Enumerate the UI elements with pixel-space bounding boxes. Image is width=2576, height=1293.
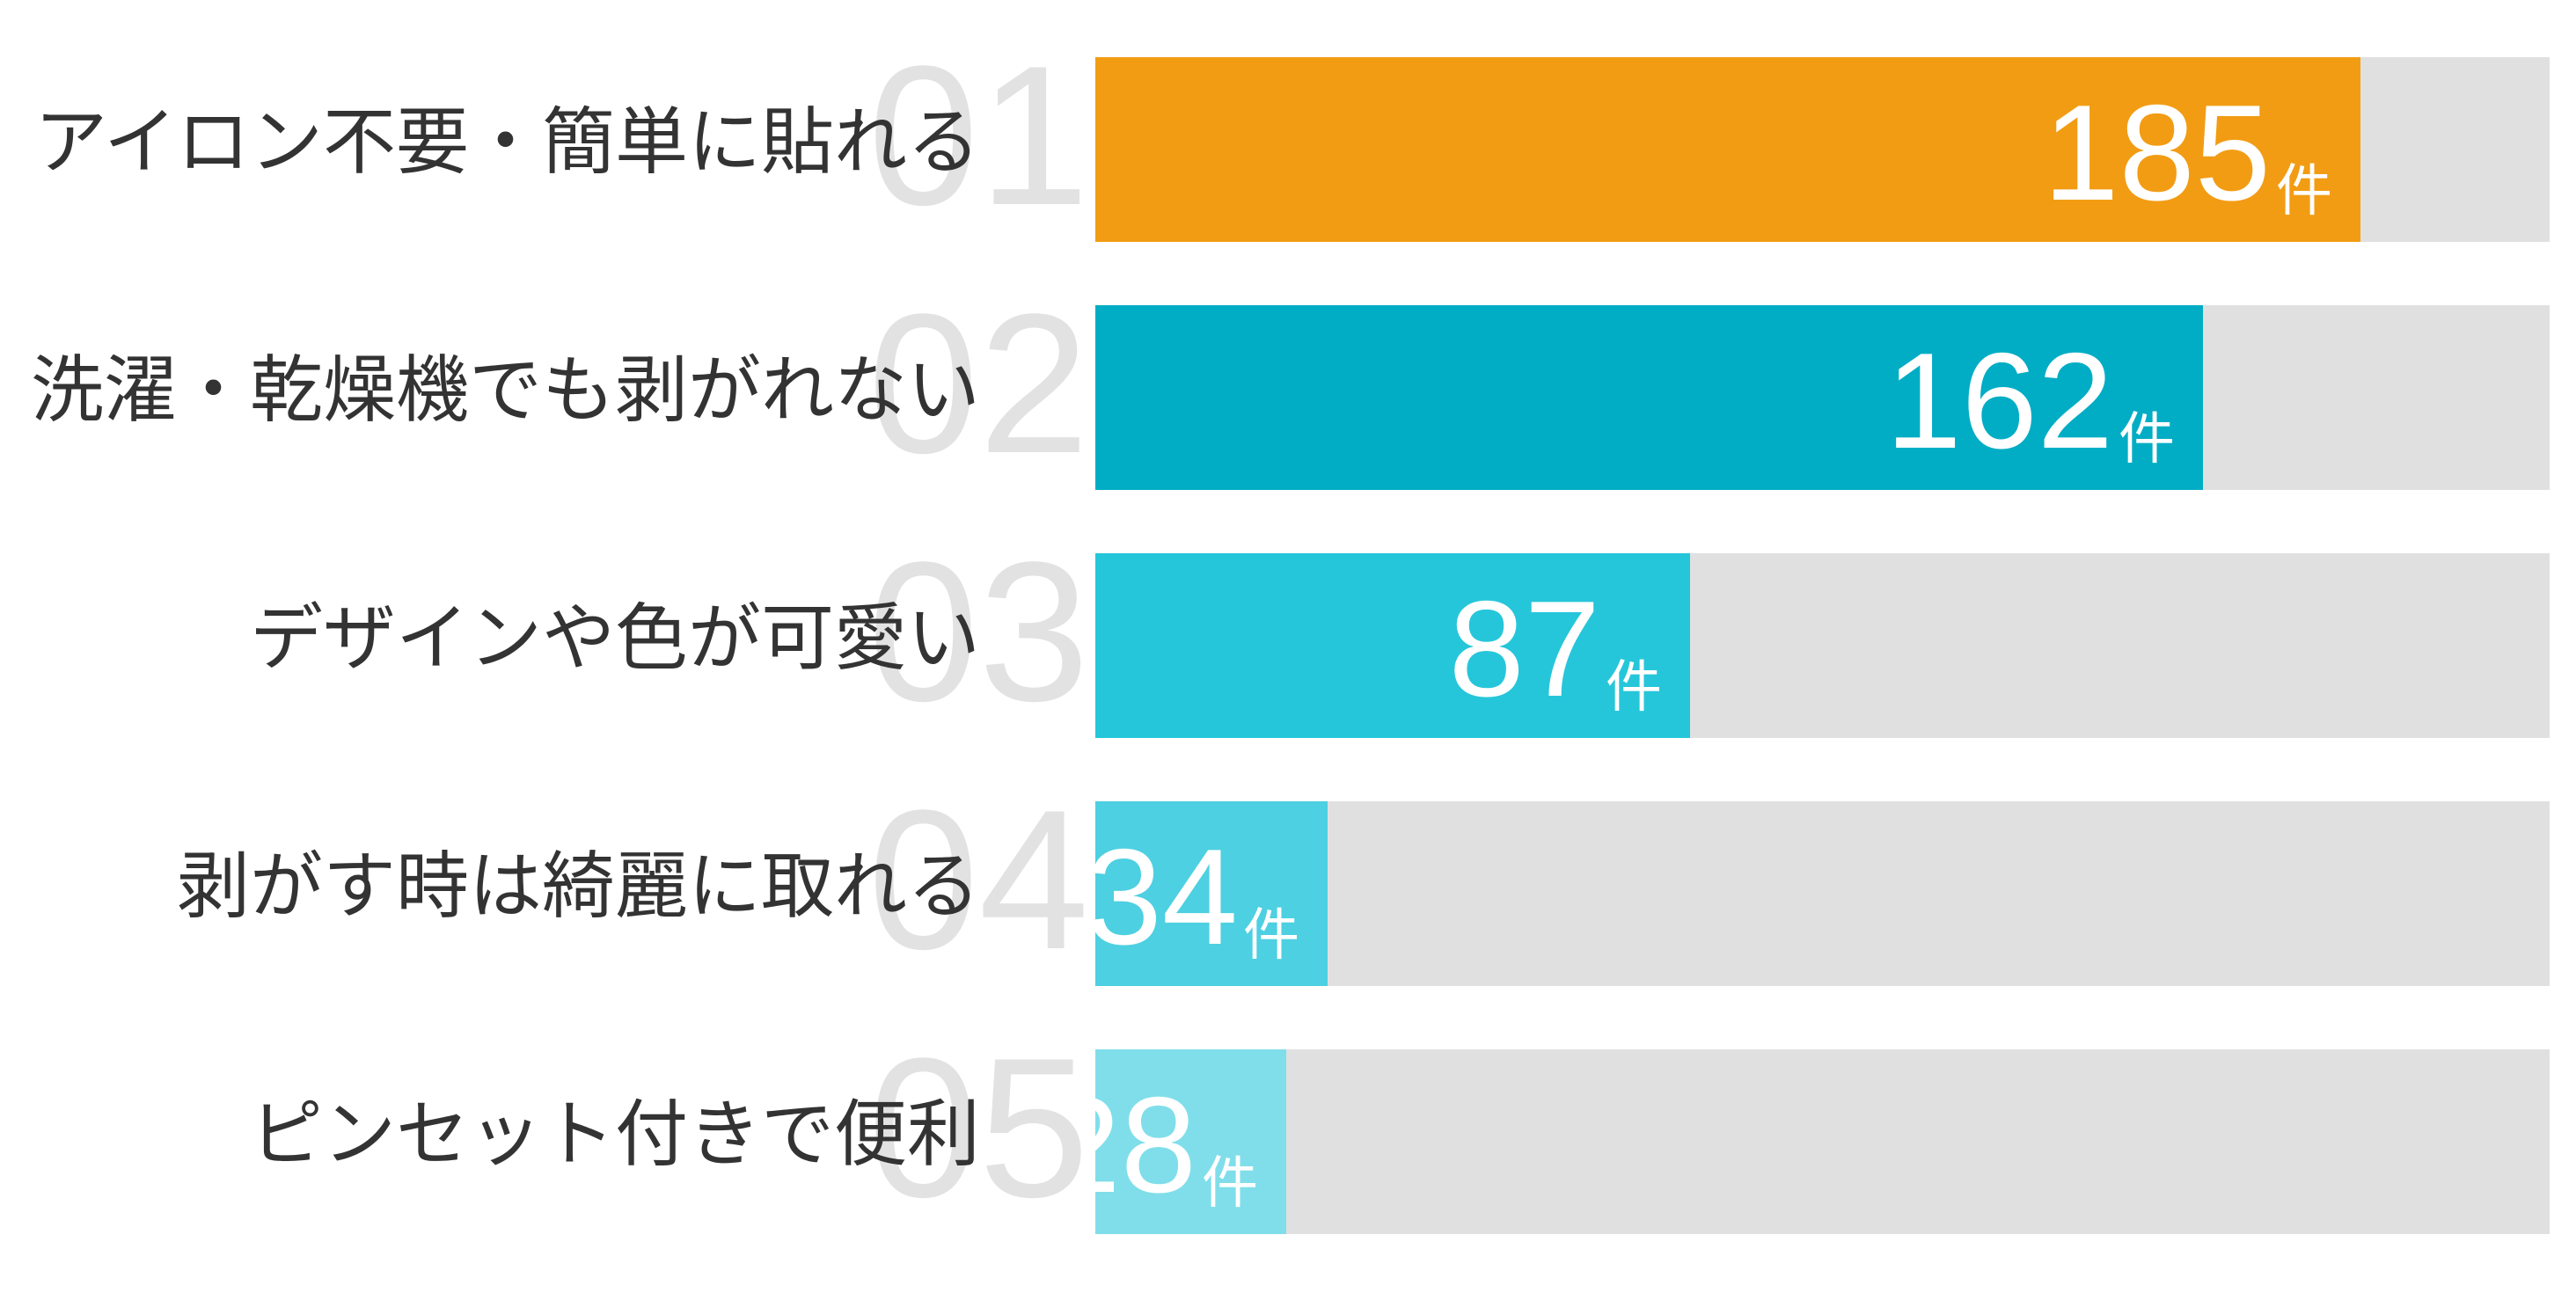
label 4: 剥がす時は綺麗に取れる	[177, 845, 980, 927]
rank number 02: 02	[868, 272, 1089, 494]
bar track 5	[1095, 1049, 2550, 1234]
value 87: 87件	[1449, 573, 1662, 725]
rank number 04: 04	[868, 768, 1089, 990]
bar fill 1	[1095, 57, 2360, 242]
bar track 1	[1095, 57, 2550, 242]
row 2	[31, 272, 2550, 494]
bar track 2	[1095, 305, 2550, 490]
rank number 03: 03	[868, 520, 1089, 742]
row 5	[250, 1016, 2550, 1238]
value 162: 162件	[1885, 325, 2175, 477]
label 1: アイロン不要・簡単に貼れる	[34, 101, 980, 183]
row 3	[250, 520, 2550, 742]
bar track 3	[1095, 553, 2550, 738]
label 3: デザインや色が可愛い	[250, 597, 980, 679]
row 4	[177, 768, 2550, 990]
value 185: 185件	[2043, 77, 2332, 229]
bar fill 5	[1095, 1049, 1286, 1234]
bar fill 2	[1095, 305, 2203, 490]
bar fill 4	[1095, 801, 1328, 986]
row 1	[34, 24, 2550, 246]
rank number 01: 01	[868, 24, 1089, 246]
bar track 4	[1095, 801, 2550, 986]
label 5: ピンセット付きで便利	[250, 1093, 980, 1175]
bar fill 3	[1095, 553, 1690, 738]
label 2: 洗濯・乾燥機でも剥がれない	[31, 349, 980, 431]
rank number 05: 05	[868, 1016, 1089, 1238]
